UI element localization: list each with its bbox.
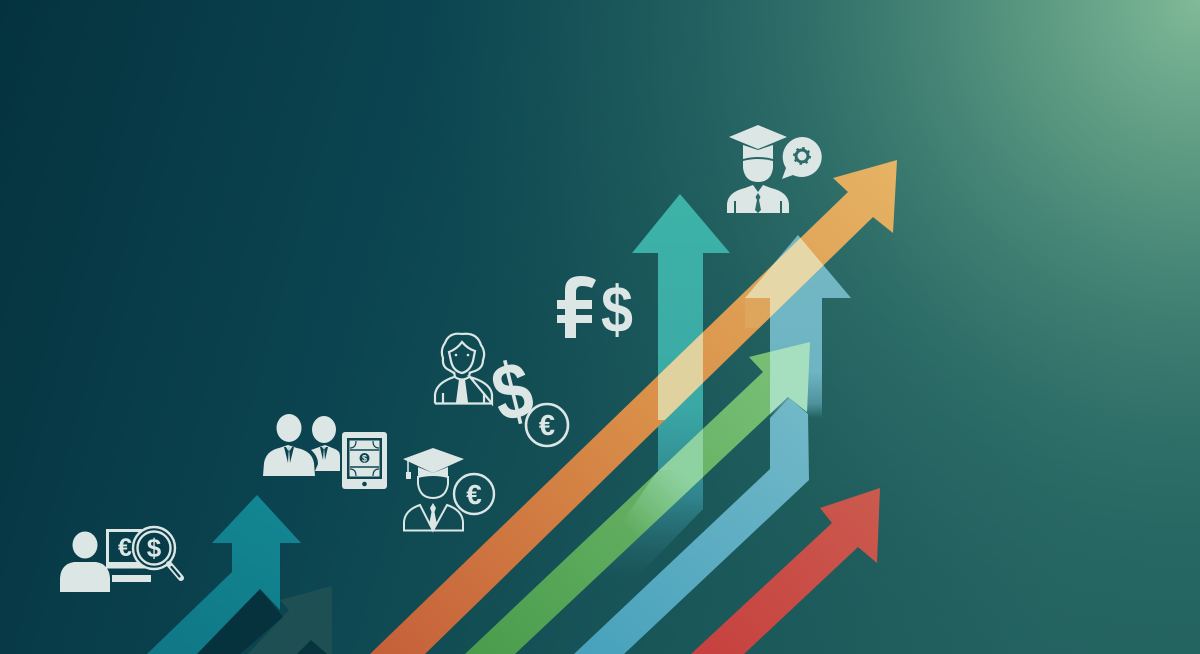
light blue arrow lower band: [574, 398, 809, 654]
overlaps on orange arrow: [658, 238, 824, 420]
red arrow: [691, 488, 880, 654]
green arrow: [465, 342, 810, 654]
icon: franc and dollar symbols: $: [601, 273, 633, 347]
teal small arrow: [147, 495, 301, 654]
large teal arrow: [596, 194, 730, 578]
orange arrow: [370, 160, 897, 654]
icon: franc and dollar symbols: [557, 273, 633, 347]
icon: graduate with euro coin: [403, 448, 494, 530]
icon: two business people with tablet: [263, 414, 387, 489]
overlaps on green arrow: [628, 342, 810, 531]
icon: analyst with currency monitor and magnifier: [60, 527, 181, 592]
icon: graduate with gear speech bubble: [727, 125, 822, 213]
icon: analyst with currency monitor and magnifier: €: [118, 534, 132, 562]
icon: euro coin: €: [539, 410, 555, 442]
light blue rising arrow upper shaft: [745, 235, 851, 418]
icon: analyst with currency monitor and magnifier: $: [147, 533, 162, 563]
icon: dollar sign: $: [483, 343, 541, 439]
icon: graduate with euro coin: €: [466, 479, 482, 510]
icon: two business people with tablet: $: [362, 454, 367, 464]
dark green small arrow: [248, 586, 332, 654]
icon: businesswoman outline: [435, 334, 492, 404]
icon: euro coin: [526, 404, 568, 446]
